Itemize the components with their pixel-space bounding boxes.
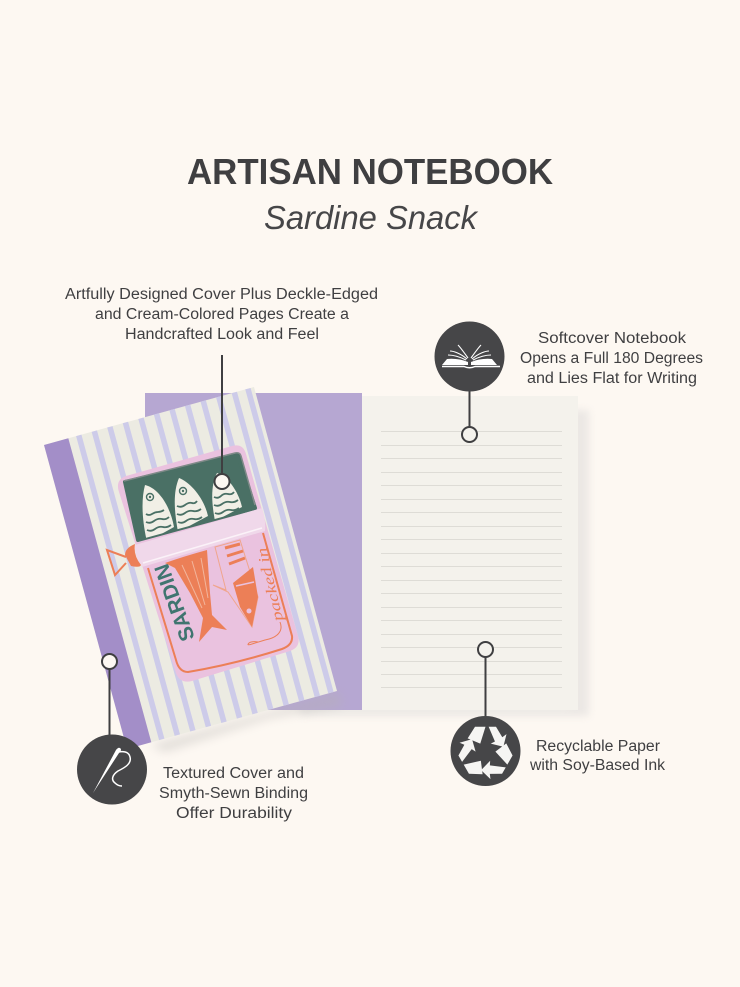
leader line bbox=[484, 656, 486, 718]
softcover text: and Lies Flat for Writing bbox=[527, 370, 697, 387]
anchor dot bbox=[102, 654, 117, 669]
orange sardine scale lines bbox=[182, 558, 208, 608]
orange can outline bbox=[148, 533, 292, 672]
can lid bbox=[135, 508, 265, 567]
front cover bbox=[44, 387, 337, 749]
callout: durability bbox=[77, 654, 308, 822]
durability text: Smyth-Sewn Binding bbox=[159, 785, 308, 802]
leader line bbox=[221, 355, 223, 474]
outlined sardine bbox=[213, 540, 258, 627]
softcover text: Opens a Full 180 Degrees bbox=[520, 350, 703, 367]
anchor dot bbox=[214, 474, 230, 489]
recyclable text: with Soy-Based Ink bbox=[529, 757, 665, 774]
window rim bbox=[124, 453, 255, 505]
three sardines bbox=[143, 473, 242, 542]
lined page bbox=[362, 396, 578, 710]
callout: softcover bbox=[434, 322, 703, 442]
cover design text: and Cream-Colored Pages Create a bbox=[95, 306, 349, 323]
leader line bbox=[108, 668, 110, 736]
title: ARTISAN NOTEBOOK bbox=[187, 151, 553, 192]
durability text: Offer Durability bbox=[176, 805, 292, 822]
spine band bbox=[44, 438, 151, 749]
callout: recyclable bbox=[450, 642, 665, 786]
can body bbox=[118, 445, 299, 682]
SARDINES label: SARDIN bbox=[151, 561, 200, 644]
script squiggle bbox=[248, 622, 281, 645]
icon: needle and thread bbox=[77, 734, 147, 804]
subtitle: Sardine Snack bbox=[264, 199, 478, 236]
lavender stripes bbox=[76, 388, 334, 740]
leader line bbox=[468, 390, 470, 428]
orange sardine bbox=[165, 550, 227, 642]
cover base bbox=[44, 387, 337, 749]
anchor dot bbox=[478, 642, 493, 657]
sardine one bbox=[143, 485, 174, 542]
notebook shadow bbox=[300, 410, 589, 716]
sardine two bbox=[175, 478, 208, 532]
sardine three bbox=[212, 473, 242, 521]
cover design text bbox=[65, 286, 378, 343]
recyclable text: Recyclable Paper bbox=[536, 738, 660, 755]
lid highlight bbox=[143, 528, 262, 563]
icon: open book bbox=[434, 322, 504, 392]
softcover text bbox=[520, 330, 703, 387]
durability text bbox=[159, 765, 308, 822]
front cover shadow bbox=[150, 692, 342, 752]
anchor dot bbox=[462, 427, 477, 442]
inside back cover bbox=[145, 393, 362, 710]
can window bbox=[125, 455, 255, 540]
packed in script: packed in bbox=[254, 546, 287, 624]
cover design text: Handcrafted Look and Feel bbox=[125, 326, 319, 343]
ruled lines bbox=[381, 432, 562, 688]
cover design text: Artfully Designed Cover Plus Deckle-Edged bbox=[65, 286, 378, 303]
can key bbox=[107, 544, 141, 575]
open notebook bbox=[145, 393, 589, 716]
infographic canvas bbox=[44, 158, 702, 822]
durability text: Textured Cover and bbox=[163, 765, 304, 782]
sardine can artwork bbox=[107, 445, 299, 682]
icon: recycling arrows bbox=[450, 716, 520, 786]
callout: cover design bbox=[65, 286, 378, 489]
softcover text: Softcover Notebook bbox=[538, 330, 686, 347]
recyclable text bbox=[529, 738, 665, 774]
